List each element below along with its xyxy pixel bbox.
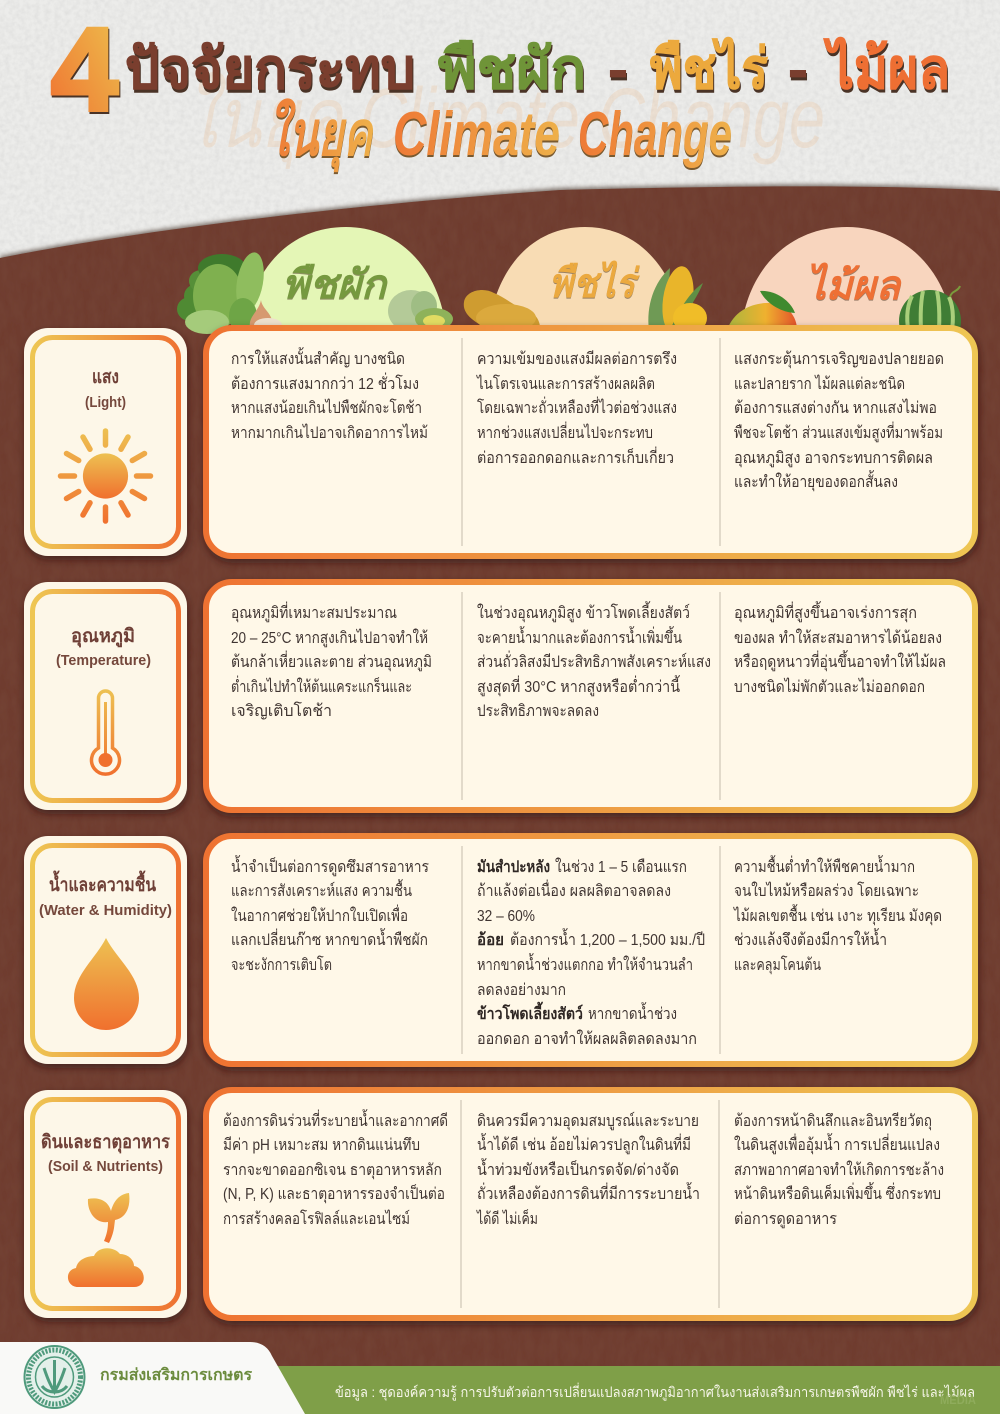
text: water, field crops: ถ้าแล้งต่อเนื่อง ผลผลิตอาจลดลง	[477, 879, 671, 900]
card: temperature	[24, 582, 187, 810]
text: temperature, vegetables	[231, 601, 432, 720]
text: soil, field crops: ได้ดี ไม่เค็ม	[475, 1208, 538, 1228]
text: soil, fruit: ต่อการดูดอาหาร	[734, 1211, 837, 1229]
panel: soil	[206, 1090, 975, 1318]
card: light	[24, 328, 187, 556]
text: water, fruit: ความชื้นต่ำทำให้พืชคายน้ำมาก	[734, 855, 915, 876]
text: water, field crops: มันสำปะหลัง	[477, 858, 550, 876]
text: soil, fruit	[734, 1112, 944, 1229]
header: vegetables	[177, 227, 453, 334]
text: light, vegetables: หากมากเกินไปอาจเกิดอาการไหม้	[231, 423, 428, 442]
text: soil, vegetables: รากจะขาดออกซิเจน ธาตุอาหารหลัก	[223, 1162, 442, 1180]
text: soil, fruit: ในดินสูงเพื่ออุ้มน้ำ การเปลี่ยนแปลง	[734, 1133, 940, 1155]
title words	[125, 36, 950, 100]
text: water, vegetables	[231, 855, 429, 974]
text: water, field crops: อ้อย	[477, 931, 504, 949]
subtitle: Climate	[393, 100, 560, 169]
subheading: water: (Water & Humidity)	[39, 902, 172, 919]
text: light, field crops: ไนโตรเจนและการสร้างผลผลิต	[475, 374, 655, 393]
footer green bar	[270, 1366, 1000, 1414]
label: fruit: ไม้ผล	[806, 262, 902, 308]
header: fruit	[727, 227, 961, 352]
title words: พืชผัก	[438, 37, 586, 100]
icon: seedling and soil	[68, 1193, 144, 1287]
text: temperature, vegetables: 20 – 25°C หากสูงเกินไปอาจทำให้	[231, 628, 428, 648]
panel: water	[206, 836, 975, 1064]
text: soil, field crops: น้ำท่วมขังหรือเป็นกรดจัด/ด่างจัด	[477, 1158, 679, 1179]
text: soil, field crops: ถั่วเหลืองต้องการดินที่มีการระบายน้ำ	[477, 1182, 700, 1203]
text: temperature, fruit: หรือฤดูหนาวที่อุ่นขึ้นอาจทำให้ไม้ผล	[734, 650, 946, 672]
heading: water: น้ำและความชื้น	[49, 870, 156, 896]
icon: onion and garlic	[250, 300, 282, 332]
subheading: soil: (Soil & Nutrients)	[48, 1158, 163, 1175]
text: soil, vegetables: (N, P, K) และธาตุอาหารรองจำเป็นต่อ	[223, 1183, 445, 1204]
text: temperature, vegetables: ต่ำเกินไปทำให้ต้นแคระแกร็นและ	[231, 675, 412, 696]
panel: light	[206, 328, 975, 556]
text: light, fruit	[734, 350, 944, 492]
icon: water drop	[74, 938, 139, 1030]
label: field crops: พืชไร่	[549, 260, 640, 306]
text: temperature, fruit: บางชนิดไม่พักตัวและไม่ออกดอก	[734, 677, 925, 696]
subheading: temperature: (Temperature)	[56, 652, 151, 669]
text: temperature, vegetables: ต้นกล้าเหี่ยวและตาย ส่วนอุณหภูมิ	[231, 650, 432, 672]
icon: mango	[727, 291, 797, 330]
background: paper texture	[0, 0, 1000, 300]
row: water and humidity	[24, 836, 975, 1064]
text: soil, field crops: ดินควรมีความอุดมสมบูรณ์และระบาย	[477, 1111, 699, 1131]
text: water, field crops: ข้าวโพดเลี้ยงสัตว์	[477, 1001, 583, 1023]
text: water, field crops: ลดลงอย่างมาก	[477, 982, 566, 999]
text: water, field crops: หากขาดน้ำช่วง	[588, 1002, 677, 1023]
text: light, field crops	[475, 350, 677, 467]
dome: field crops	[488, 227, 684, 330]
text: water, vegetables: และการสังเคราะห์แสง ความชื้น	[231, 879, 412, 900]
text: soil, vegetables: ต้องการดินร่วนที่ระบายน้ำและอากาศดี	[223, 1109, 448, 1130]
text: light, vegetables	[231, 347, 428, 442]
text: light, field crops: โดยเฉพาะถั่วเหลืองที่ไวต่อช่วงแสง	[477, 396, 677, 417]
text: temperature, field crops	[477, 601, 711, 720]
logo: department seal	[24, 1346, 84, 1408]
text: water, field crops: 32 – 60%	[477, 908, 535, 925]
subtitle: ในยุค	[268, 98, 374, 173]
text: soil, fruit: หน้าดินหรือดินเค็มเพิ่มขึ้น ซึ่งกระทบ	[734, 1182, 941, 1203]
text: light, fruit: และทำให้อายุของดอกสั้นลง	[734, 470, 898, 492]
subheading: light: (Light)	[85, 394, 126, 411]
text: temperature, vegetables: เจริญเติบโตช้า	[231, 701, 332, 720]
text: light, fruit: ต้องการแสงต่างกัน หากแสงไม่พอ	[734, 398, 937, 417]
text: soil, fruit: สภาพอากาศอาจทำให้เกิดการชะล้าง	[734, 1160, 944, 1179]
text: water, field crops: ออกดอก อาจทำให้ผลผลิตลดลงมาก	[477, 1029, 697, 1048]
title words: -	[788, 37, 808, 100]
panel: temperature	[206, 582, 975, 810]
text: water, vegetables: แลกเปลี่ยนก๊าซ หากขาดน้ำพืชผัก	[231, 928, 428, 949]
text: water, fruit: และคลุมโคนต้น	[734, 955, 821, 975]
text: water, field crops	[477, 857, 705, 1048]
text: water, field crops: ต้องการน้ำ 1,200 – 1,500 มม./ปี	[510, 928, 705, 949]
title words: ปัจจัยกระทบ	[125, 37, 415, 100]
text: light, field crops: หากช่วงแสงเปลี่ยนไปจะกระทบ	[477, 421, 653, 442]
heading: light: แสง	[92, 367, 119, 388]
icon: lettuce	[177, 250, 268, 334]
text: temperature, field crops: ประสิทธิภาพจะลดลง	[477, 703, 599, 720]
title	[51, 4, 950, 136]
text: light, vegetables: การให้แสงนั้นสำคัญ บางชนิด	[231, 347, 405, 368]
text: temperature, fruit: ของผล ทำให้สะสมอาหารได้น้อยลง	[734, 628, 942, 647]
text: temperature, fruit	[734, 601, 946, 696]
text: water, fruit: ช่วงแล้งจึงต้องมีการให้น้ำ	[734, 928, 887, 949]
text: water, vegetables: ในอากาศช่วยให้ปากใบเปิดเพื่อ	[231, 904, 408, 925]
heading: soil: ดินและธาตุอาหาร	[41, 1132, 171, 1154]
text: light, vegetables: หากแสงน้อยเกินไปพืชผักจะโตช้า	[231, 398, 422, 417]
subtitle ghost echo: ในยุค Climate Change	[185, 71, 825, 169]
text: soil, vegetables: มีค่า pH เหมาะสม หากดินแน่นทึบ	[223, 1136, 420, 1154]
dome: vegetables	[244, 227, 446, 330]
heading: temperature: อุณหภูมิ	[71, 626, 135, 648]
text: soil, fruit: ต้องการหน้าดินลึกและอินทรียวัตถุ	[734, 1112, 932, 1131]
text: soil, vegetables: การสร้างคลอโรฟิลล์และเอนไซม์	[223, 1209, 410, 1228]
subtitle: Change	[578, 100, 732, 169]
card: water	[24, 836, 187, 1064]
text: water, field crops: ในช่วง 1 – 5 เดือนแรก	[555, 857, 687, 876]
header: field crops	[464, 227, 707, 336]
text: light, fruit: พืชจะโตช้า ส่วนแสงเข้มสูงที่มาพร้อม	[734, 421, 943, 443]
text: light, fruit: อุณหภูมิสูง อาจกระทบการติดผล	[734, 450, 933, 468]
title words: พืชไร่	[650, 36, 768, 100]
title words: ไม้ผล	[823, 36, 950, 100]
text: water, fruit: จนใบไหม้หรือผลร่วง โดยเฉพาะ	[734, 881, 919, 900]
text: temperature, vegetables: อุณหภูมิที่เหมาะสมประมาณ	[231, 601, 397, 623]
text: temperature, field crops: จะคายน้ำมากและต้องการน้ำเพิ่มขึ้น	[477, 626, 682, 647]
text: soil, field crops: น้ำได้ดี เช่น อ้อยไม่ควรปลูกในดินที่มี	[477, 1133, 691, 1155]
label: vegetables: พืชผัก	[282, 263, 389, 307]
subtitle	[268, 98, 732, 173]
title numeral 4: 4	[51, 4, 118, 136]
text: light, field crops: ความเข้มของแสงมีผลต่อการตรึง	[477, 350, 677, 368]
card: soil	[24, 1090, 187, 1318]
dome: fruit	[741, 227, 953, 330]
text: light, fruit: และปลายราก ไม้ผลแต่ละชนิด	[734, 374, 905, 393]
icon: sun	[60, 431, 150, 521]
icon: potatoes	[464, 290, 540, 332]
row: temperature	[24, 582, 975, 810]
text: temperature, fruit: อุณหภูมิที่สูงขึ้นอาจเร่งการสุก	[734, 601, 917, 623]
icon: thermometer	[92, 691, 120, 774]
text: temperature, field crops: สูงสุดที่ 30°C หากสูงหรือต่ำกว่านี้	[477, 675, 680, 697]
row: light	[24, 328, 975, 556]
icon: cabbage	[388, 290, 453, 332]
text: soil, vegetables	[223, 1109, 448, 1228]
watermark: MEDIA	[940, 1393, 976, 1407]
text: light, vegetables: ต้องการแสงมากกว่า 12 ชั่วโมง	[231, 372, 419, 393]
text: light, fruit: แสงกระตุ้นการเจริญของปลายยอด	[734, 350, 944, 369]
text: water, vegetables: น้ำจำเป็นต่อการดูดซึมสารอาหาร	[231, 855, 429, 877]
footer	[0, 1342, 1000, 1414]
row: soil and nutrients	[24, 1090, 975, 1318]
footer white tab	[0, 1342, 305, 1414]
icon: corn	[648, 264, 707, 336]
department name: กรมส่งเสริมการเกษตร	[100, 1366, 252, 1384]
text: temperature, field crops: ในช่วงอุณหภูมิสูง ข้าวโพดเลี้ยงสัตว์	[477, 601, 690, 623]
text: temperature, field crops: ส่วนถั่วลิสงมีประสิทธิภาพสังเคราะห์แสง	[477, 650, 711, 671]
text: water, vegetables: จะชะงักการเติบโต	[231, 955, 332, 974]
title words: -	[608, 37, 628, 100]
text: light, field crops: ต่อการออกดอกและการเก็บเกี่ยว	[477, 446, 674, 467]
icon: watermelon	[899, 286, 961, 352]
text: water, field crops: หากขาดน้ำช่วงแตกกอ ทำให้จำนวนลำ	[477, 953, 693, 974]
text: soil, field crops	[475, 1111, 700, 1228]
text: water, fruit	[732, 855, 942, 975]
text: water, fruit: ไม้ผลเขตชื้น เช่น เงาะ ทุเรียน มังคุด	[732, 904, 942, 926]
